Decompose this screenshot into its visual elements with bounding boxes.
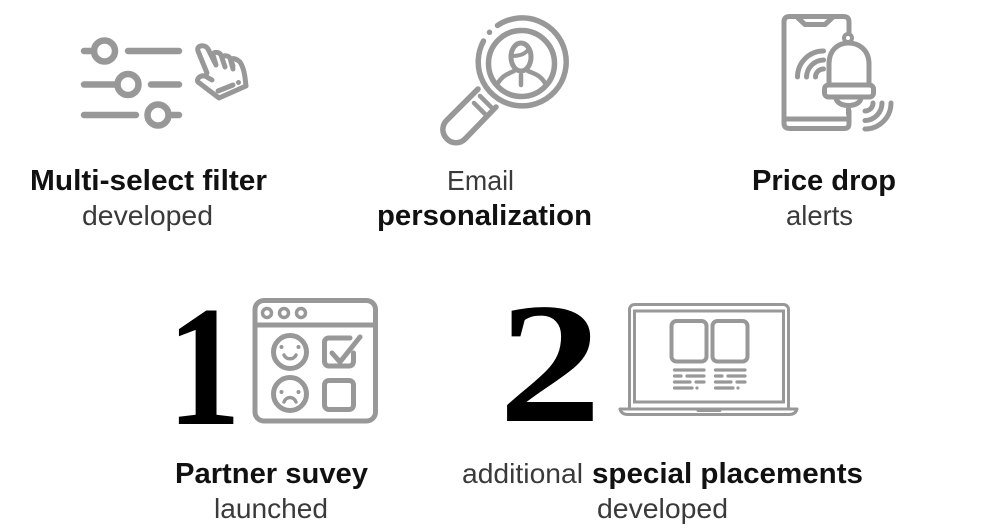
heading: Multi-select filter: Multi-select filter <box>30 165 267 197</box>
panel: price drop alerts <box>752 16 896 231</box>
icon: magnifier with person <box>443 18 566 143</box>
heading: special placements: special placements <box>592 458 863 490</box>
numeral: 2: 2 <box>498 269 602 459</box>
label: additional: additional <box>462 458 583 489</box>
icon: phone with bell <box>784 16 891 129</box>
label: launched: launched <box>214 493 328 524</box>
icon: sliders <box>84 40 179 126</box>
panel: partner survey <box>167 271 376 524</box>
panel: email personalization <box>377 18 592 232</box>
icon: pointing hand <box>197 46 246 98</box>
icon: laptop with cards <box>620 304 797 414</box>
label: Email: Email <box>447 165 514 196</box>
heading: personalization: personalization <box>377 200 592 232</box>
numeral: 1: 1 <box>167 271 241 462</box>
icon: survey window <box>255 300 376 421</box>
heading: Partner suvey: Partner suvey <box>175 458 368 490</box>
heading: Price drop: Price drop <box>752 165 896 197</box>
label: developed: developed <box>82 200 213 231</box>
panel: special placements <box>462 269 863 524</box>
label: alerts: alerts <box>786 200 853 231</box>
label: developed: developed <box>597 493 728 524</box>
panel: multi-select filter <box>30 40 267 231</box>
